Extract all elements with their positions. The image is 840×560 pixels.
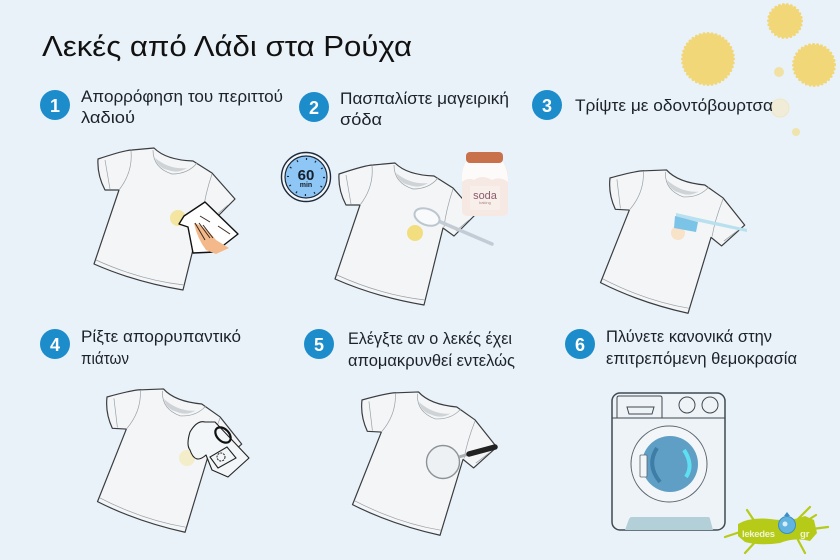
panel: step 1 (40, 88, 283, 290)
logo: lekedes.gr: lekedes (742, 529, 775, 540)
panel: step 5 (304, 329, 515, 538)
step 4 text (81, 328, 241, 368)
panel: step 4 (40, 328, 249, 535)
step 1 badge (40, 90, 70, 120)
icon: spoon (412, 205, 492, 244)
step 4 text: πιάτων (81, 350, 129, 368)
step 1 text: λαδιού (81, 109, 135, 127)
step 2 text: σόδα (340, 111, 382, 129)
panel: step 2 (282, 90, 509, 305)
step 1 text: Απορρόφηση του περιττού (81, 88, 283, 106)
decorative oil blobs (682, 4, 834, 136)
step 6 badge: 6 (575, 335, 585, 355)
panel: step 6 (565, 328, 797, 530)
step 6 text: Πλύνετε κανονικά στην (606, 328, 772, 346)
icon: washing machine (612, 393, 725, 530)
icon: t-shirt with cloth (94, 148, 238, 290)
step 5 text: απομακρυνθεί εντελώς (348, 352, 515, 370)
icon: soda jar: soda (473, 190, 498, 202)
step 4 text: Ρίξτε απορρυπαντικό (81, 328, 241, 346)
icon: t-shirt with detergent bottle (96, 386, 249, 535)
step 3 badge (532, 90, 562, 120)
step 1 text (81, 88, 283, 127)
step 4 badge (40, 329, 70, 359)
step 3 text: Τρίψτε με οδοντόβουρτσα (575, 97, 773, 115)
title: Λεκές από Λάδι στα Ρούχα (42, 31, 412, 63)
step 5 badge (304, 329, 334, 359)
step 6 text: επιτρεπόμενη θεμοκρασία (606, 350, 797, 368)
step 4 badge: 4 (50, 335, 60, 355)
icon: 60 min timer (282, 152, 330, 202)
icon: soda jar (462, 152, 508, 216)
step 2 text (340, 90, 509, 129)
icon: t-shirt with magnifier (351, 389, 499, 538)
step 2 badge: 2 (309, 98, 319, 118)
step 6 badge (565, 329, 595, 359)
icon: soda jar: baking (479, 200, 491, 205)
step 5 text (348, 330, 515, 370)
step 2 badge (299, 92, 329, 122)
step 3 badge: 3 (542, 96, 552, 116)
icon: t-shirt (335, 163, 476, 305)
panel: step 3 (532, 90, 773, 316)
step 1 badge: 1 (50, 96, 60, 116)
logo: lekedes.gr: gr (800, 529, 810, 540)
step 5 badge: 5 (314, 335, 324, 355)
logo: lekedes.gr (725, 507, 828, 553)
step 2 text: Πασπαλίστε μαγειρική (340, 90, 509, 108)
step 6 text (606, 328, 797, 368)
icon: 60 min timer: 60 (298, 167, 314, 184)
icon: 60 min timer: min (300, 182, 312, 189)
icon: t-shirt with toothbrush (599, 167, 747, 316)
step 5 text: Ελέγξτε αν ο λεκές έχει (348, 330, 512, 348)
